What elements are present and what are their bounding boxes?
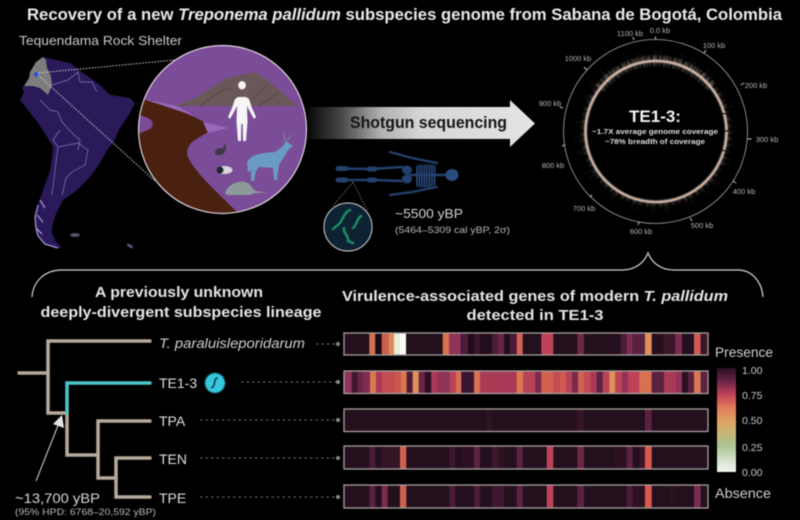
leader lines [200, 344, 336, 497]
kb labels: 500 kb [691, 221, 713, 230]
legend [715, 344, 773, 501]
TE1-3 branch [67, 383, 150, 413]
coverage gaps [722, 113, 732, 152]
heatmap row: TPA [344, 409, 708, 432]
kb labels: 1100 kb [617, 29, 643, 38]
ticks [560, 36, 752, 225]
phylogenetic tree [19, 341, 150, 497]
divergence date [15, 490, 156, 518]
sample age: (5464–5309 cal yBP, 2σ) [395, 225, 510, 236]
heatmap row: TE1-3 [344, 371, 708, 394]
taxon labels: TEN [159, 451, 187, 467]
bracket [32, 253, 763, 297]
taxon labels: TPA [159, 413, 186, 429]
heatmap row: TEN [344, 446, 708, 469]
kb labels: 700 kb [573, 204, 595, 213]
sample age [395, 206, 510, 236]
coverage hairs [580, 56, 732, 208]
taxon labels: TPE [159, 490, 186, 506]
legend ticks [742, 365, 763, 479]
microbe zoom lines [333, 182, 367, 210]
icon: TE1-3 badge [206, 374, 224, 392]
heading: virulence genes: Virulence-associated genes of modern T. pallidum [342, 289, 728, 305]
icon: guinea pig [216, 166, 232, 174]
legend ticks: 0.00 [742, 467, 763, 479]
ring centre text: TE1-3: [629, 107, 681, 126]
taxon labels [159, 336, 305, 506]
sample age: ~5500 yBP [395, 206, 463, 221]
genome coverage ring: ~1.7X average genome coverage [592, 127, 718, 136]
shotgun sequencing arrow: Shotgun sequencing [350, 114, 507, 132]
kb labels: 200 kb [745, 81, 767, 90]
divergence arrow [36, 415, 64, 481]
skeleton [338, 152, 458, 195]
kb labels [539, 26, 778, 236]
heatmap row: TPE [344, 485, 708, 508]
legend ticks: 0.75 [742, 390, 763, 402]
legend: Absence [715, 485, 771, 501]
map: South America [20, 57, 135, 249]
icon: deer [247, 141, 293, 181]
legend ticks: 0.25 [742, 442, 763, 454]
heading: lineage: A previously unknown [95, 285, 263, 301]
kb labels: 800 kb [542, 161, 564, 170]
divergence date: (95% HPD: 6768–20,592 yBP) [15, 507, 156, 518]
landscape circle [130, 45, 308, 222]
title: Recovery of a new Treponema pallidum subspecies genome from Sabana de Bogotá, Colombia [27, 5, 783, 24]
mountain [175, 72, 298, 106]
heatmap row: T. paraluisleporidarum [344, 333, 708, 355]
river [138, 99, 237, 214]
text: detected in TE1-3 [466, 308, 604, 324]
kb labels: 100 kb [703, 41, 725, 50]
heading: lineage: deeply-divergent subspecies lineage [40, 305, 322, 321]
shotgun sequencing arrow [308, 100, 535, 147]
icon: rabbit [215, 144, 226, 155]
taxon labels: TE1-3 [159, 375, 197, 391]
legend ticks: 0.50 [742, 415, 763, 427]
human figure [228, 81, 256, 141]
site marker [34, 72, 39, 77]
genome coverage ring: ~78% breadth of coverage [605, 137, 705, 146]
heading: lineage [40, 285, 322, 321]
legend ticks: 1.00 [742, 365, 763, 377]
microbe inset circle [324, 203, 372, 251]
icon: armadillo [225, 182, 268, 195]
kb labels: 400 kb [733, 187, 755, 196]
colour bar [717, 368, 736, 472]
genome coverage ring [539, 26, 778, 236]
site label: Tequendama Rock Shelter [19, 33, 183, 48]
kb labels: 0.0 kb [650, 26, 670, 35]
kb labels: 300 kb [756, 135, 778, 144]
map zoom dotted lines [38, 60, 175, 181]
kb labels: 1000 kb [565, 54, 591, 63]
taxon labels: T. paraluisleporidarum [159, 336, 305, 351]
kb labels: 900 kb [539, 99, 561, 108]
legend: Presence [715, 344, 773, 360]
divergence date: ~13,700 yBP [15, 490, 100, 506]
kb labels: 600 kb [630, 227, 652, 236]
